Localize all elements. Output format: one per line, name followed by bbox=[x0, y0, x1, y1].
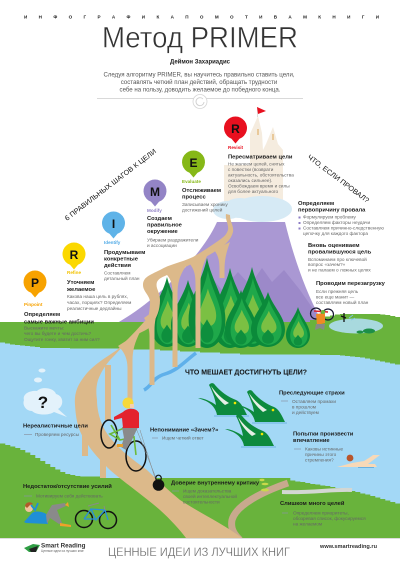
obstacle: too many goals: Определяем приоритеты, bbox=[293, 510, 349, 516]
footer logo bbox=[24, 544, 40, 552]
obstacle: fears: Преследующие страхи bbox=[279, 390, 345, 396]
step E: Evaluate: Отслеживаем bbox=[182, 188, 221, 194]
step P: Pinpoint bbox=[24, 271, 100, 342]
obstacle: inner critic: Доверие внутреннему критику bbox=[171, 480, 260, 486]
step R: Refine: Уточняем bbox=[67, 280, 94, 286]
step M: Modify: Убираем раздражители bbox=[147, 238, 199, 242]
obstacle: inner critic: Ищем доказательства bbox=[183, 488, 232, 494]
obstacle: impress bbox=[293, 432, 354, 462]
obstacle: why: Ищем четкий ответ bbox=[162, 434, 204, 440]
obstacle: fears: и действуем bbox=[292, 409, 319, 415]
obstacle: lack of effort bbox=[23, 483, 112, 498]
failure: root cause: Формулируем проблему bbox=[303, 214, 356, 220]
step M: Modify: M bbox=[150, 185, 160, 199]
lake bbox=[329, 318, 383, 334]
failure: reboot: все еще манит — bbox=[316, 294, 354, 300]
step M: Modify: правильное bbox=[147, 222, 183, 228]
step E: Evaluate: Evaluate bbox=[182, 179, 201, 184]
footer: Ценные идеи из лучших книг bbox=[41, 549, 85, 553]
failure: re-evaluate goal: вопрос «зачем?» bbox=[308, 262, 346, 267]
obstacle: too many goals: на желаемом bbox=[293, 522, 322, 526]
obstacle: impress: Каковы истинные bbox=[305, 446, 343, 452]
step P: Pinpoint: Выскажите мечты: bbox=[24, 326, 64, 330]
small figure with bicycle on shoulders bbox=[310, 308, 334, 330]
obstacle: unrealistic goals: Нереалистичные цели bbox=[23, 424, 88, 430]
step R: Refine bbox=[62, 243, 131, 311]
step M: Modify: Создаем bbox=[147, 216, 172, 222]
step I: Identify: детальный план bbox=[104, 275, 140, 281]
bridge pillars bbox=[82, 242, 230, 478]
failure: reboot: Проводим перезагрузку bbox=[316, 281, 386, 287]
thought cloud with question mark bbox=[23, 368, 67, 417]
overline: infographic series: И Н Ф О Г Р А Ф И К А П О М О Т И В А М К Н И Г И bbox=[24, 14, 379, 20]
failure: reboot: составляем новый план bbox=[316, 299, 369, 305]
step M: Modify: Modify bbox=[147, 208, 162, 213]
step R: Revisit: R bbox=[231, 122, 240, 136]
resting man bbox=[24, 502, 71, 527]
castle bbox=[224, 107, 283, 205]
snow cloud bbox=[213, 196, 292, 222]
step I: Identify: I bbox=[112, 217, 115, 231]
obstacle: fears bbox=[279, 390, 345, 415]
step E: Evaluate bbox=[182, 151, 228, 212]
obstacle: too many goals: Слишком много целей bbox=[280, 500, 345, 507]
step P: Pinpoint: самые важные амбиции bbox=[24, 318, 94, 326]
step R: Refine: реалистичные дедлайны bbox=[67, 305, 122, 311]
obstacle: inner critic: состоятельности bbox=[183, 500, 220, 504]
obstacle: unrealistic goals: Проверяем ресурсы bbox=[35, 432, 80, 437]
blue bicycle on grass bbox=[76, 503, 116, 528]
step R: Refine: часах, порциях? Определяем bbox=[67, 300, 131, 305]
step R: Revisit bbox=[224, 117, 294, 194]
failure: root cause: Определяем факторы неудачи bbox=[303, 220, 370, 225]
river base bbox=[0, 342, 400, 510]
obstacle: why bbox=[150, 428, 218, 440]
step R: Revisit: Освобождаем время и силы bbox=[228, 184, 290, 188]
river shadow band bbox=[144, 353, 196, 390]
step R: Refine: R bbox=[70, 248, 79, 262]
bottom-right meadow path bbox=[232, 483, 352, 540]
step I: Identify: Продумываем bbox=[104, 250, 145, 256]
title: Метод PRIMER bbox=[102, 22, 298, 54]
step P: Pinpoint: Определяем bbox=[24, 312, 60, 318]
mountain bbox=[117, 222, 320, 330]
failure: re-evaluate goal bbox=[308, 243, 372, 272]
obstacle: impress: стремления? bbox=[305, 458, 334, 462]
failure: reboot bbox=[316, 281, 386, 305]
heading: obstacles: ЧТО МЕШАЕТ ДОСТИГНУТЬ ЦЕЛИ? bbox=[185, 370, 307, 376]
step E: Evaluate: достижений целей bbox=[182, 206, 223, 212]
step P: Pinpoint: Ощутите гонку, хватит за ним сил? bbox=[24, 337, 100, 342]
footer: www.smartreading.ru bbox=[319, 544, 377, 550]
main cyclist bbox=[101, 398, 146, 471]
far river bank bbox=[0, 322, 400, 364]
step E: Evaluate: процесс bbox=[182, 194, 207, 200]
obstacle: too many goals: обозревая список, фокусируемся bbox=[293, 516, 366, 521]
author: Деймон Захариадис bbox=[170, 58, 231, 66]
intro text bbox=[103, 72, 295, 94]
step I: Identify: действия bbox=[104, 262, 131, 269]
obstacle: impress: причины этого bbox=[305, 452, 337, 457]
failure: root cause: Составляем причинно-следственную bbox=[303, 226, 384, 230]
green ground base bbox=[0, 323, 400, 539]
kettlebell with rope bbox=[136, 428, 164, 491]
heading: 6 steps: 6 ПРАВИЛЬНЫХ ШАГОВ К ЦЕЛИ bbox=[64, 148, 158, 223]
failure: re-evaluate goal: провалившуюся цель bbox=[308, 250, 372, 256]
intro text: Следуя алгоритму PRIMER, вы научитесь правильно ставить цели, bbox=[103, 72, 295, 78]
bridge road bbox=[75, 214, 242, 538]
step R: Revisit: для более актуального bbox=[228, 189, 279, 194]
thought cloud with question mark: ? bbox=[38, 393, 48, 412]
step I: Identify bbox=[102, 212, 145, 281]
footer bbox=[0, 538, 400, 562]
obstacle: impress: впечатление bbox=[293, 438, 330, 444]
step M: Modify: окружение bbox=[147, 229, 179, 235]
step E: Evaluate: Записываем хронику bbox=[182, 202, 228, 207]
intro text: составлять четкий план действий, обращать трудности bbox=[121, 79, 277, 86]
step R: Revisit: Пересматриваем цели bbox=[228, 154, 293, 160]
failure: root cause: Определяем bbox=[298, 201, 334, 207]
failure: root cause: первопричину провала bbox=[298, 208, 366, 214]
step I: Identify: Identify bbox=[104, 240, 121, 245]
crocodiles bbox=[198, 383, 287, 447]
divider with refresh icon bbox=[97, 94, 303, 108]
obstacle: inner critic: своей интеллектуальной bbox=[183, 493, 237, 499]
step R: Refine: желаемое bbox=[66, 287, 96, 293]
stepping stones bbox=[260, 479, 269, 492]
step R: Revisit: актуальность, обстоятельства bbox=[228, 172, 294, 178]
failure: root cause: цепочку для каждого фактора bbox=[303, 231, 368, 236]
footer: Smart Reading bbox=[41, 542, 86, 550]
step R: Revisit: Revisit bbox=[228, 145, 244, 150]
near river bank bbox=[0, 444, 400, 539]
step R: Revisit: оказались сильнее). bbox=[228, 178, 272, 183]
failure: re-evaluate goal: Вновь оцениваем bbox=[308, 243, 360, 249]
heading: what if failed: ЧТО, ЕСЛИ ПРОВАЛ? bbox=[306, 154, 370, 205]
step M: Modify bbox=[144, 180, 199, 248]
failure: re-evaluate goal: и не палаем о ложных целях bbox=[308, 268, 371, 272]
obstacle: why: Непонимание «Зачем?» bbox=[150, 428, 218, 434]
obstacle: fears: Оставляем промахи bbox=[292, 399, 336, 404]
step I: Identify: конкретные bbox=[104, 256, 139, 262]
step E: Evaluate: E bbox=[189, 156, 198, 170]
forest bbox=[151, 258, 310, 348]
step P: Pinpoint: Pinpoint bbox=[24, 302, 43, 307]
step R: Refine: Refine bbox=[67, 270, 81, 275]
failure: re-evaluate goal: Вспоминаем про ключевой bbox=[308, 256, 367, 262]
obstacle: too many goals bbox=[280, 500, 366, 526]
step M: Modify: и ассоциации bbox=[147, 243, 177, 248]
step R: Revisit: с повестки (возврати bbox=[228, 167, 274, 172]
failure: root cause bbox=[298, 201, 384, 236]
obstacle: lack of effort: Мотивируем себя действовать bbox=[36, 492, 103, 498]
step I: Identify: Составляем bbox=[104, 270, 131, 276]
step R: Revisit: Не жалеем целей, снятых bbox=[228, 160, 285, 166]
obstacle: lack of effort: Недостаток/отсутствие усилий bbox=[23, 483, 112, 490]
small diver in lake bbox=[341, 313, 355, 322]
swimmer bbox=[337, 455, 380, 468]
right hill bbox=[300, 314, 400, 327]
intro text: себе на пользу, доводить желаемое до победного конца. bbox=[120, 86, 281, 94]
obstacle: impress: Попытки произвести bbox=[293, 432, 354, 438]
obstacle: unrealistic goals bbox=[23, 424, 88, 437]
obstacle: fears: в прошлом bbox=[292, 404, 316, 410]
step R: Refine: Какова наша цель в рублях, bbox=[67, 294, 128, 299]
footer: ЦЕННЫЕ ИДЕИ ИЗ ЛУЧШИХ КНИГ bbox=[108, 547, 291, 559]
step P: Pinpoint: чего вы будете и чем достичь? bbox=[24, 331, 92, 336]
obstacle: inner critic bbox=[171, 480, 260, 504]
failure: reboot: Если прежняя цель bbox=[316, 289, 359, 294]
step P: Pinpoint: P bbox=[31, 276, 39, 290]
